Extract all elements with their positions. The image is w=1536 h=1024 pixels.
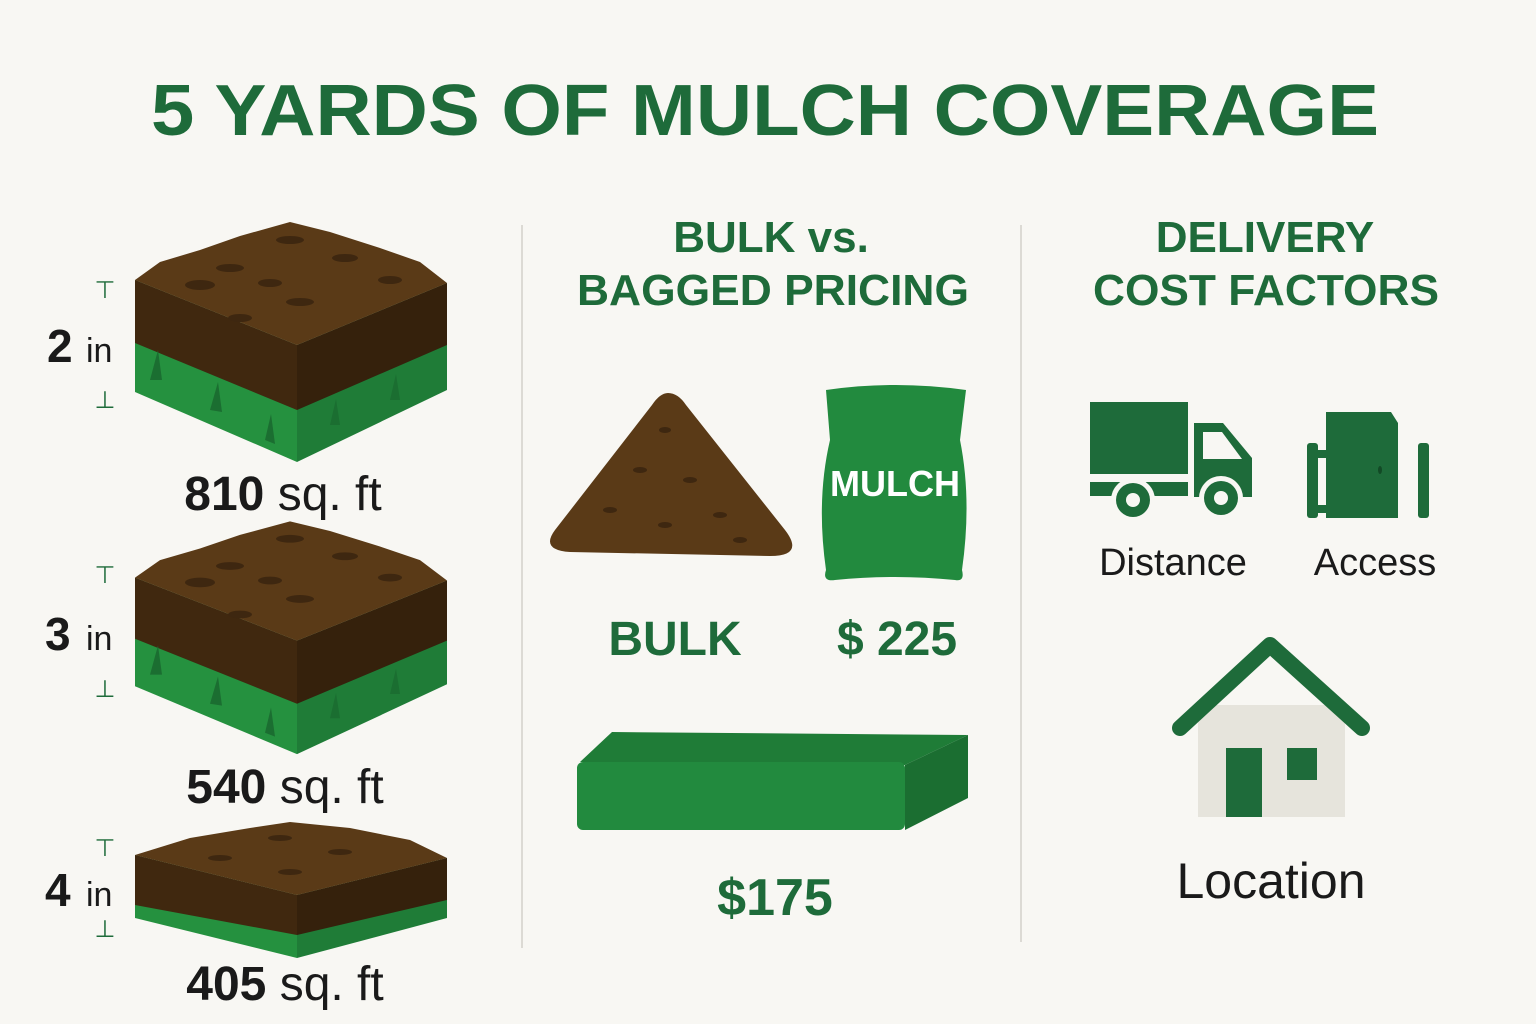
block: 4 in: ⊤ (95, 835, 115, 862)
heading: bulk vs bagged (577, 213, 969, 315)
block: 2 in: ⊤ (95, 277, 115, 304)
icon: truck (1090, 402, 1252, 522)
block: 3 in: 3 (45, 608, 71, 660)
heading: bulk vs bagged: BULK vs. (673, 213, 869, 262)
block: 3 in (45, 521, 447, 814)
heading: delivery cost factors: COST FACTORS (1093, 266, 1439, 315)
block: 2 in: in (86, 332, 112, 370)
icon: mulch bag (822, 385, 967, 580)
block: 3 in: ⊤ (95, 562, 115, 589)
block: 2 in: ⊥ (95, 387, 115, 414)
icon: door access (1307, 412, 1429, 518)
label: bulk: BULK (608, 613, 742, 666)
icon: bulk pile (550, 393, 792, 556)
heading: bulk vs bagged: BAGGED PRICING (577, 266, 969, 315)
block: 3 in: in (86, 620, 112, 658)
block: 2 in (47, 222, 447, 521)
block: 2 in: 810 sq. ft (184, 468, 382, 521)
label: bag price: $ 225 (837, 613, 957, 666)
block: 4 in: in (86, 876, 112, 914)
block: 4 in (45, 822, 447, 1011)
label: access: Access (1314, 542, 1436, 584)
label: distance: Distance (1099, 542, 1247, 584)
icon: mulch bag: MULCH (830, 463, 960, 504)
block: 4 in: 405 sq. ft (186, 958, 384, 1011)
icon: house (1180, 645, 1362, 817)
block: 3 in: 540 sq. ft (186, 761, 384, 814)
block: 2 in: 2 (47, 320, 73, 372)
label: bulk price: $175 (717, 869, 833, 927)
block: 3 in: ⊥ (95, 676, 115, 703)
label: location: Location (1176, 853, 1366, 909)
icon: slab (577, 732, 968, 830)
heading: delivery cost factors (1093, 213, 1439, 315)
heading: delivery cost factors: DELIVERY (1156, 213, 1374, 262)
block: 4 in: 4 (45, 864, 71, 916)
title: 5 YARDS OF MULCH COVERAGE (151, 71, 1379, 151)
block: 4 in: ⊥ (95, 916, 115, 943)
